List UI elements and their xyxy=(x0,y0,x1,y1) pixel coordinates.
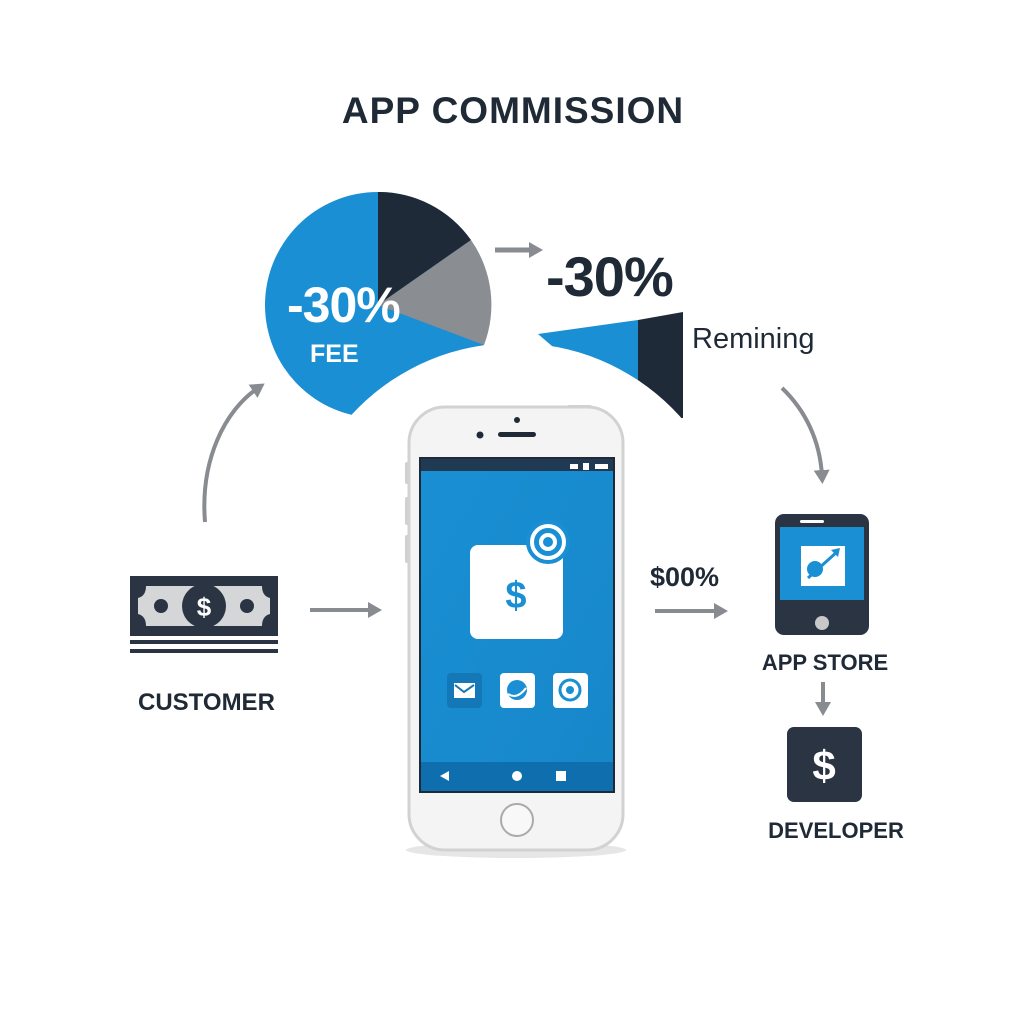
pie label xyxy=(287,277,400,368)
title: APP COMMISSION xyxy=(342,90,684,131)
white cutout arc xyxy=(293,343,737,787)
app store label: APP STORE xyxy=(762,650,888,675)
phone screen xyxy=(420,458,614,792)
remaining percent text: -30% xyxy=(546,245,673,308)
arrow: pie to label xyxy=(495,248,535,252)
icon: money bill: $ xyxy=(197,592,212,622)
customer label: CUSTOMER xyxy=(138,689,275,716)
payment label: $00% xyxy=(650,562,719,592)
arrow: customer to phone xyxy=(310,608,374,612)
icon: app dollar: $ xyxy=(505,575,527,617)
remaining label: Remining xyxy=(692,323,814,355)
arrow: remaining down to app store xyxy=(782,388,822,476)
arrow: phone to app store xyxy=(655,609,720,613)
pie label: FEE xyxy=(310,340,359,368)
arrow: app store to developer xyxy=(821,682,825,708)
icon: money bill xyxy=(130,576,278,653)
pie label: -30% xyxy=(287,277,400,333)
icon: developer dollar: $ xyxy=(812,742,836,789)
icons: small apps xyxy=(447,673,588,708)
home button xyxy=(501,804,533,836)
icon: app store tablet xyxy=(775,514,869,635)
arrow: customer up to pie xyxy=(204,388,258,522)
developer label: DEVELOPER xyxy=(768,818,904,843)
phone xyxy=(405,405,626,858)
icon: app dollar xyxy=(470,520,570,639)
pie chart xyxy=(265,192,491,418)
remaining wedge xyxy=(538,312,683,420)
icon: developer dollar xyxy=(787,727,862,802)
